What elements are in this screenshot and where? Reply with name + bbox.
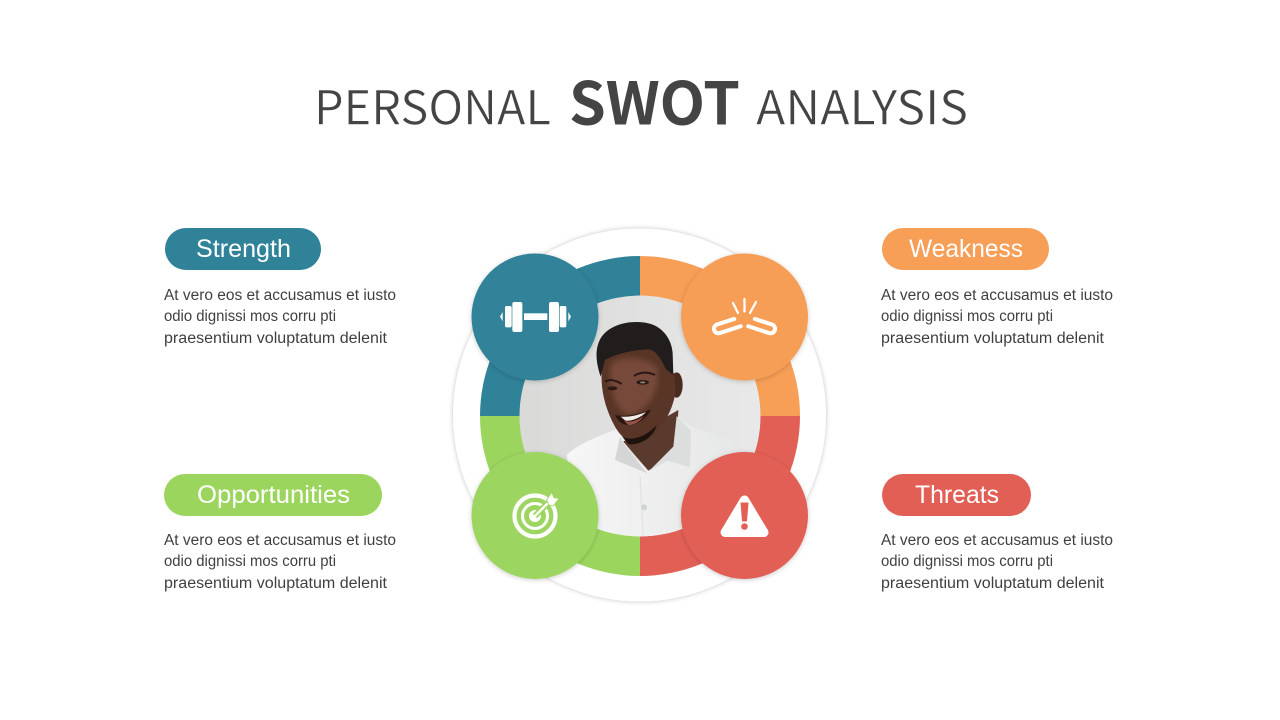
icon: target with arrow [514, 492, 559, 536]
right collar [649, 416, 691, 471]
threats description: odio dignissi mos corru pti [881, 553, 1053, 570]
left collar [615, 437, 647, 473]
shirt shading [640, 477, 643, 540]
central SWOT diagram [453, 228, 826, 602]
opportunities description: praesentium voluptatum delenit [164, 575, 388, 592]
weakness description: odio dignissi mos corru pti [881, 308, 1053, 325]
opportunities description: odio dignissi mos corru pti [164, 553, 336, 570]
face [602, 343, 675, 442]
eyes [607, 386, 617, 390]
icon: broken chain [713, 299, 776, 334]
strength description: At vero eos et accusamus et iusto [164, 287, 396, 304]
ear [674, 372, 683, 398]
strength label pill [165, 228, 321, 270]
weakness circle [681, 254, 808, 380]
weakness description: praesentium voluptatum delenit [881, 330, 1105, 347]
panel: strength [164, 228, 396, 347]
eyebrows [605, 373, 655, 384]
strength label pill: Strength [196, 235, 291, 263]
threats description: praesentium voluptatum delenit [881, 575, 1105, 592]
title [314, 56, 968, 142]
weakness label pill: Weakness [909, 235, 1023, 263]
threats label pill [882, 474, 1031, 516]
opportunities description: At vero eos et accusamus et iusto [164, 532, 396, 549]
opportunities circle [472, 452, 598, 579]
title: SWOT [569, 56, 740, 142]
threats circle [681, 452, 808, 579]
shirt [566, 418, 685, 536]
beard [622, 425, 657, 444]
icon: warning triangle [725, 500, 764, 532]
neck [623, 410, 678, 471]
shirt button [641, 504, 647, 510]
hair [597, 322, 673, 377]
icon: dumbbell [500, 302, 571, 332]
outer white disc [453, 228, 826, 602]
title: PERSONAL [314, 70, 551, 138]
threats label pill: Threats [915, 481, 999, 509]
portrait photo [515, 290, 765, 543]
strength description: praesentium voluptatum delenit [164, 330, 388, 347]
weakness label pill [882, 228, 1049, 270]
strength circle [472, 254, 598, 380]
panel: weakness [881, 228, 1113, 347]
title: ANALYSIS [756, 70, 968, 138]
weakness description: At vero eos et accusamus et iusto [881, 287, 1113, 304]
face highlight [610, 358, 658, 415]
panel: opportunities [164, 474, 396, 592]
opportunities label pill [164, 474, 382, 516]
ring segments [480, 256, 800, 576]
mouth [615, 409, 651, 425]
opportunities label pill: Opportunities [197, 481, 350, 509]
panel: threats [881, 474, 1113, 592]
threats description: At vero eos et accusamus et iusto [881, 532, 1113, 549]
strength description: odio dignissi mos corru pti [164, 308, 336, 325]
